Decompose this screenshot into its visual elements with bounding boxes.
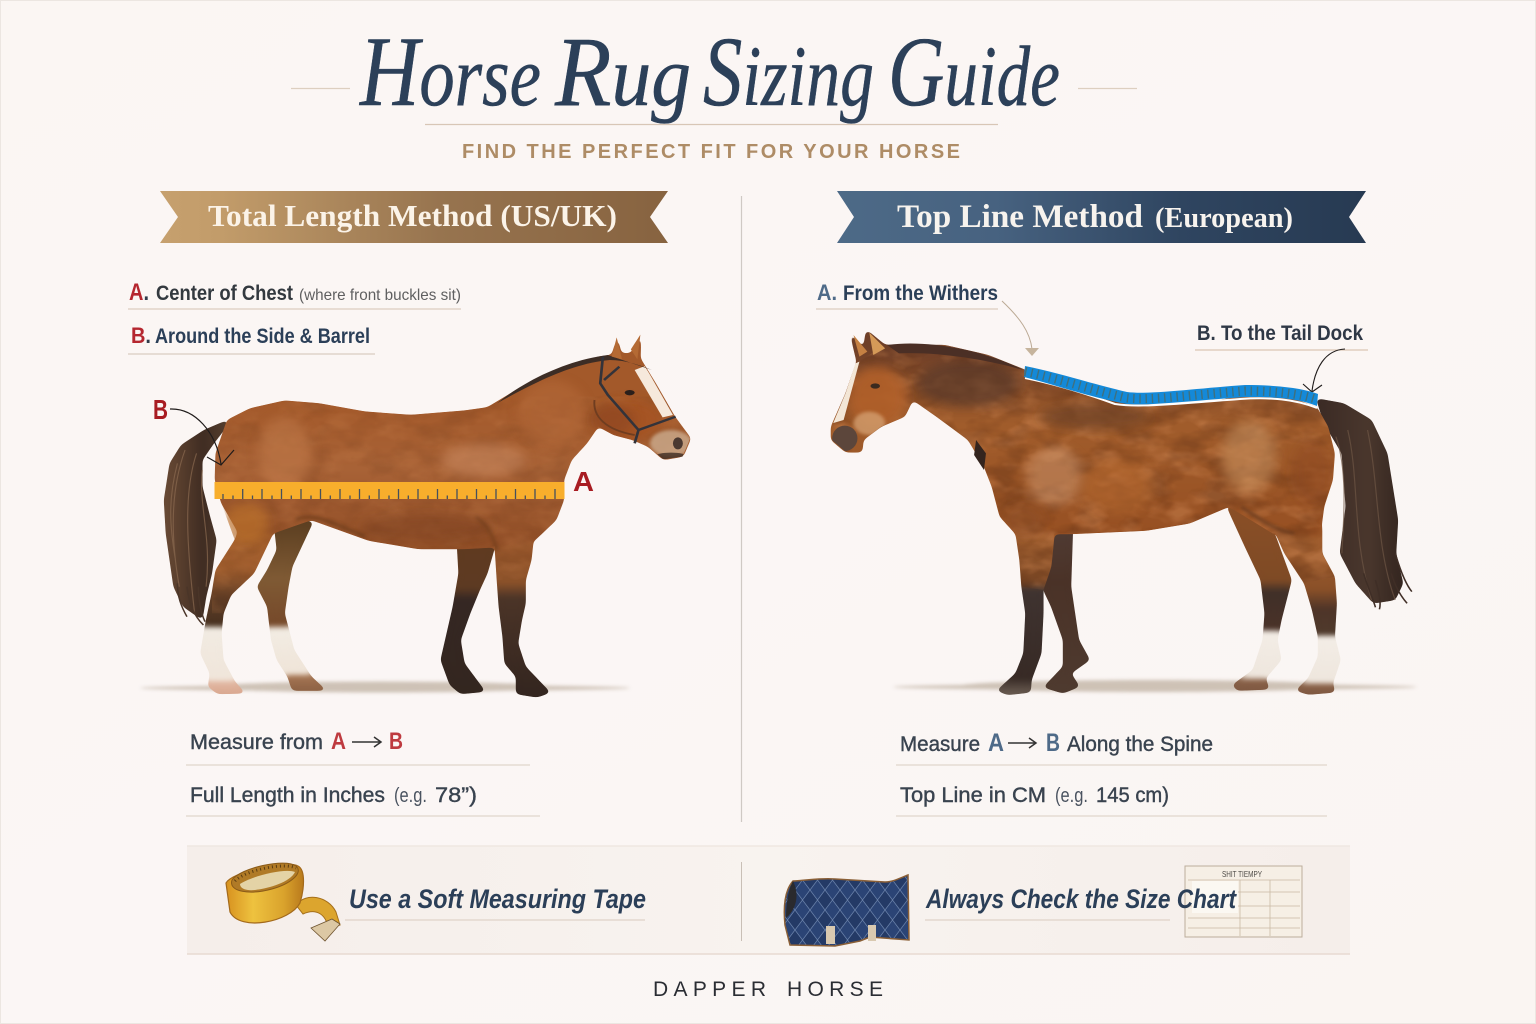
halter xyxy=(600,357,676,443)
label: A center of chest: Center of Chest xyxy=(156,282,293,305)
label: A from the withers xyxy=(816,280,1039,356)
label: A center of chest xyxy=(128,279,461,309)
icon: soft measuring tape xyxy=(226,863,340,941)
icon: size chart: SHIT TIEMPY xyxy=(1222,870,1263,879)
banner: top line method xyxy=(837,191,1366,243)
label: A center of chest: A. xyxy=(129,279,149,306)
caption: full length in inches: 78”) xyxy=(435,784,477,807)
caption: full length in inches xyxy=(186,784,540,816)
mane xyxy=(497,355,652,403)
body shading xyxy=(208,366,694,613)
banner: total length method xyxy=(160,191,668,243)
title: Horse Rug Sizing Guide: Rug xyxy=(554,16,691,127)
panel: tips xyxy=(187,846,1350,954)
marker B with arrow xyxy=(153,394,234,465)
illustration: horse facing right with tape xyxy=(140,280,1417,1001)
caption: measure from A to B xyxy=(186,728,530,765)
label: B to the tail dock xyxy=(1195,322,1368,392)
banner: top line method: (European) xyxy=(1155,202,1293,234)
banner: top line method: Top Line Method xyxy=(897,199,1143,235)
tip text: size chart: Always Check the Size Chart xyxy=(925,884,1237,914)
ground shadow xyxy=(893,680,1417,692)
label: B around the side and barrel: Around the Side & Barrel xyxy=(155,325,370,348)
banner: total length method: Total Length Method (US/UK) xyxy=(208,198,617,233)
caption: top line in cm: 145 cm) xyxy=(1096,784,1169,807)
label: B to the tail dock: B. To the Tail Dock xyxy=(1197,322,1363,345)
shoulder shadow xyxy=(974,440,986,470)
marker A: A xyxy=(573,466,594,497)
subtitle: FIND THE PERFECT FIT FOR YOUR HORSE xyxy=(462,141,960,163)
illustration: horse facing left with tape xyxy=(187,329,1417,1001)
icon: size chart xyxy=(1185,866,1302,937)
title: Horse Rug Sizing Guide: Horse xyxy=(358,16,541,127)
caption: measure A to B along the spine: Along the Spine xyxy=(1067,733,1213,756)
caption: measure A to B along the spine: A xyxy=(988,729,1004,757)
marker B with arrow: B xyxy=(153,394,168,425)
caption: top line in cm: Top Line in CM xyxy=(900,784,1046,807)
caption: measure from A to B: Measure from xyxy=(190,731,323,754)
title: Horse Rug Sizing Guide: Guide xyxy=(888,16,1060,127)
brand: Dapper Horse: HORSE xyxy=(787,978,883,1001)
caption: top line in cm: (e.g. xyxy=(1055,785,1088,807)
title: Horse Rug Sizing Guide: Sizing xyxy=(703,16,874,127)
icon: horse rug xyxy=(784,875,909,946)
eye xyxy=(625,390,635,395)
tape measure: orange ruler xyxy=(214,482,564,499)
label: B around the side and barrel xyxy=(128,323,375,354)
caption: measure from A to B: B xyxy=(389,728,403,755)
tape measure: blue top line xyxy=(1024,366,1318,408)
caption: full length in inches: Full Length in Inches xyxy=(190,784,385,807)
ground shadow xyxy=(140,682,630,692)
caption: measure A to B along the spine: Measure xyxy=(900,733,980,756)
tip text: soft tape: Use a Soft Measuring Tape xyxy=(349,884,646,914)
caption: top line in cm xyxy=(896,784,1327,816)
caption: measure A to B along the spine xyxy=(896,729,1327,765)
far legs xyxy=(257,517,497,694)
tail xyxy=(164,419,229,625)
label: A center of chest: (where front buckles sit) xyxy=(299,287,461,304)
caption: measure from A to B: A xyxy=(331,728,346,755)
caption: measure A to B along the spine: B xyxy=(1046,729,1060,757)
caption: full length in inches: (e.g. xyxy=(394,785,427,807)
ears and eye xyxy=(853,335,867,357)
brand: Dapper Horse xyxy=(653,978,883,1001)
title: Horse Rug Sizing Guide xyxy=(291,16,1137,127)
label: A from the withers: A. xyxy=(817,280,837,305)
brand: Dapper Horse: DAPPER xyxy=(653,978,766,1001)
label: B around the side and barrel: B. xyxy=(131,323,151,348)
body and near legs xyxy=(200,334,691,697)
body and near legs xyxy=(831,329,1341,695)
far legs xyxy=(1043,503,1292,693)
tail xyxy=(1316,398,1412,609)
label: A from the withers: From the Withers xyxy=(843,282,998,305)
body shading xyxy=(826,340,1340,593)
